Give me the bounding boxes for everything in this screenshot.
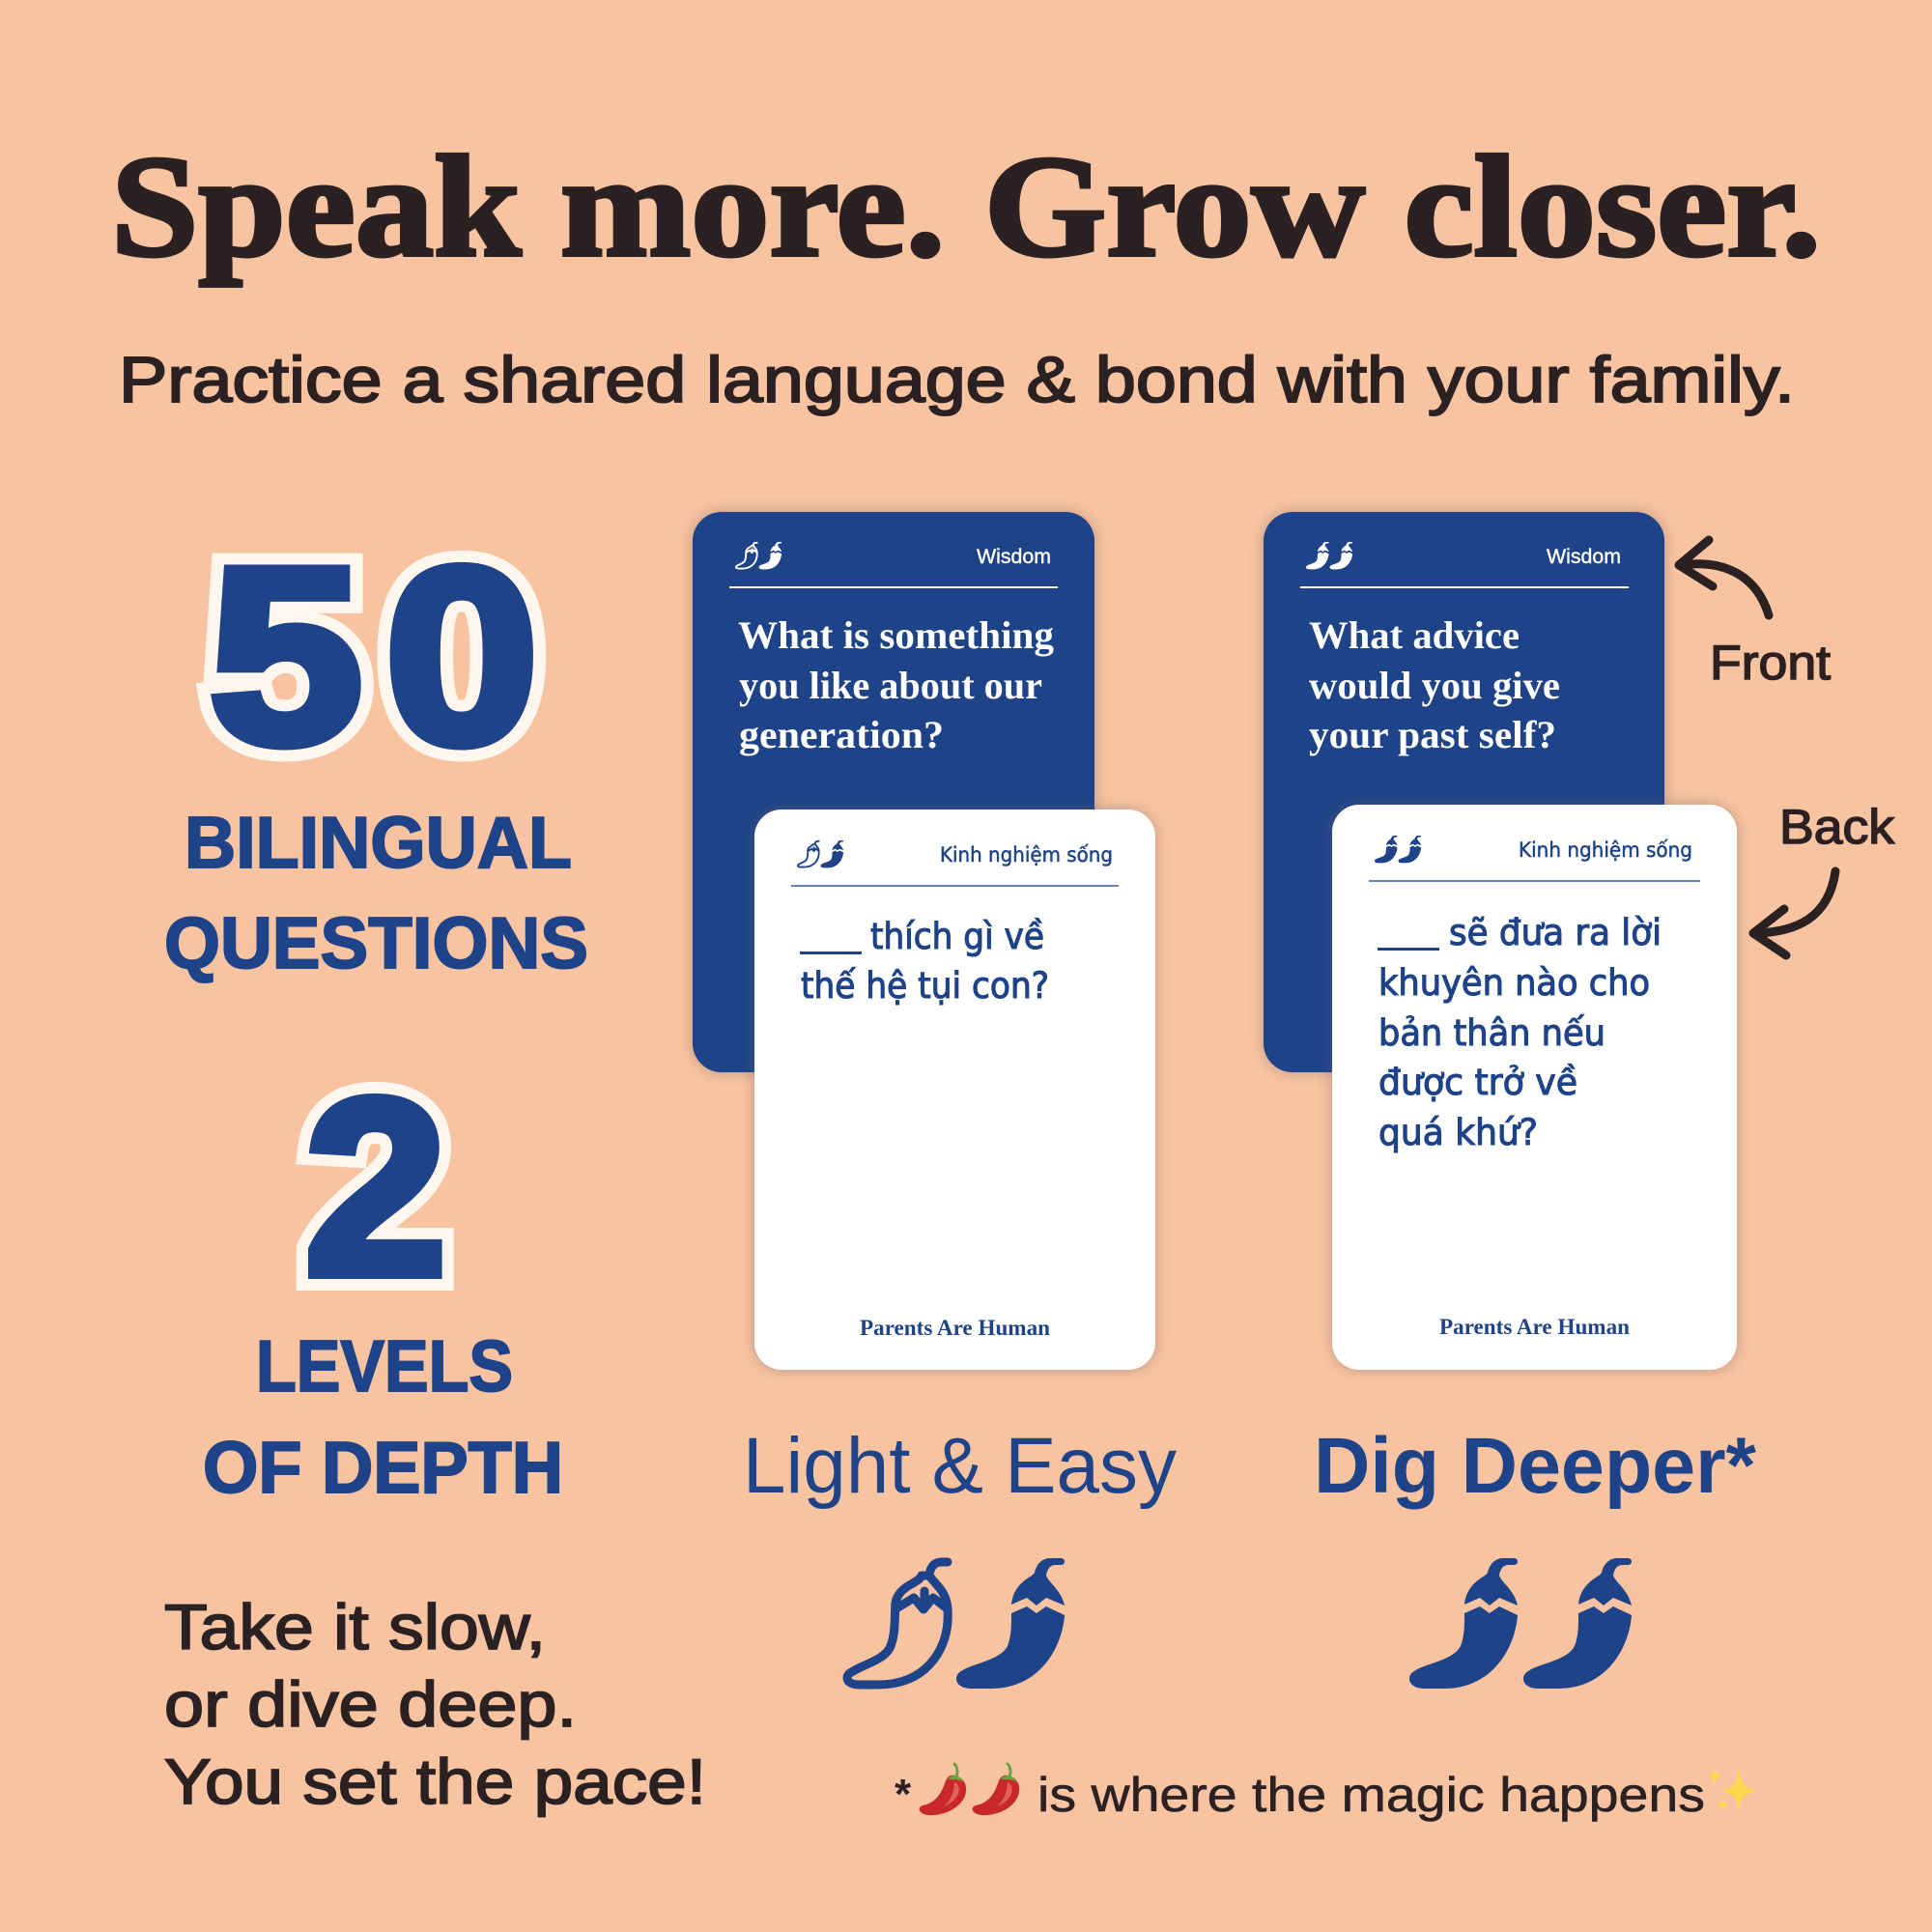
- category label: Wisdom: [977, 546, 1051, 568]
- back card: [754, 810, 1155, 1370]
- question: thế hệ tụi con?: [801, 965, 1049, 1007]
- back card: [1332, 805, 1737, 1370]
- icon: mini chilis: [798, 840, 843, 867]
- icon: red chili emoji: [973, 1764, 1019, 1815]
- tagline: You set the pace!: [164, 1746, 706, 1817]
- heading: dig deeper: Dig Deeper*: [1314, 1422, 1756, 1510]
- question: generation?: [739, 713, 944, 756]
- label: bilingual: BILINGUAL: [185, 802, 572, 883]
- tagline: or dive deep.: [164, 1668, 577, 1740]
- stat: 2 levels of depth: [203, 1047, 563, 1508]
- number 2: 2: [305, 1047, 446, 1326]
- question: What advice: [1309, 613, 1520, 657]
- question: thích gì về: [870, 916, 1044, 957]
- category label: Kinh nghiệm sống: [1519, 838, 1692, 862]
- number 50: [210, 516, 538, 795]
- category label: Kinh nghiệm sống: [940, 843, 1113, 867]
- footer: Parents Are Human: [1439, 1315, 1630, 1339]
- question: [1378, 912, 1662, 1153]
- tagline: [164, 1591, 706, 1817]
- question: your past self?: [1309, 713, 1556, 756]
- question: would you give: [1309, 664, 1560, 707]
- icon: dig deeper chilis: [1409, 1558, 1632, 1689]
- annotation: back: Back: [1779, 800, 1895, 854]
- footer: Parents Are Human: [860, 1316, 1050, 1340]
- title: Speak more. Grow closer.: [111, 127, 1821, 287]
- number 50: 0: [385, 516, 538, 795]
- stat: 50 bilingual questions: [164, 516, 588, 983]
- card pair: dig deeper: [1264, 512, 1737, 1370]
- question: What is something: [738, 613, 1054, 657]
- annotation: front: Front: [1710, 636, 1831, 690]
- annotation: back: [1753, 800, 1895, 955]
- tagline: Take it slow,: [164, 1591, 546, 1662]
- front card: [1264, 512, 1664, 1072]
- question: you like about our: [739, 664, 1042, 707]
- icon: mini chilis: [1375, 836, 1421, 863]
- icon: mini chilis: [736, 542, 781, 569]
- label: questions: QUESTIONS: [164, 902, 588, 983]
- number 50: 5: [210, 516, 362, 795]
- footnote: [895, 1764, 1756, 1822]
- label: levels: LEVELS: [256, 1325, 513, 1406]
- footnote: is where the magic happens: [1037, 1768, 1705, 1822]
- question: bản thân nếu: [1378, 1012, 1605, 1054]
- card pair: light and easy: [693, 512, 1155, 1370]
- category label: Wisdom: [1547, 546, 1621, 568]
- heading: light and easy: Light & Easy: [743, 1422, 1177, 1510]
- footnote: *: [895, 1771, 912, 1818]
- label: of depth: OF DEPTH: [203, 1427, 563, 1508]
- subtitle: Practice a shared language & bond with your family.: [119, 344, 1795, 416]
- icon: sparkles: [1708, 1766, 1756, 1812]
- annotation: front: [1679, 540, 1831, 690]
- question: sẽ đưa ra lời: [1449, 912, 1662, 953]
- number 50: 5: [210, 516, 362, 795]
- front card: [693, 512, 1094, 1072]
- question: khuyên nào cho: [1378, 962, 1650, 1004]
- number 2: 2: [305, 1047, 446, 1326]
- question: [1309, 613, 1560, 756]
- question: được trở về: [1378, 1062, 1577, 1103]
- icon: light and easy chilis: [847, 1558, 1065, 1689]
- question: [800, 916, 1049, 1007]
- icon: mini chilis: [1306, 542, 1352, 569]
- icon: red chili emoji: [920, 1764, 966, 1815]
- question: [738, 613, 1054, 756]
- number 50: 0: [385, 516, 538, 795]
- question: quá khứ?: [1378, 1112, 1538, 1153]
